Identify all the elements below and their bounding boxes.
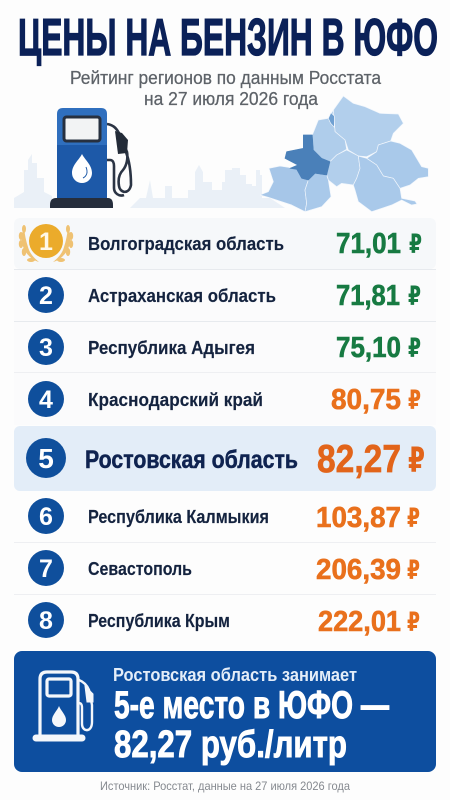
row 3: Adygea [28,329,421,365]
map of the Southern Federal District [260,96,428,212]
row 2: Astrakhan: 71,81 [336,280,400,312]
row 8: Crimea: 222,01 [318,606,401,638]
row 8: Crimea: Республика Крым [88,611,230,631]
callout: summary banner [14,651,436,772]
row 4: Krasnodar: 80,75 [331,384,401,416]
region: northwest [312,110,347,162]
row 6: Kalmykia [28,498,420,534]
panel: ranking list [14,218,436,642]
row 6: Kalmykia: 103,87 [316,502,401,534]
row 4: Krasnodar [28,381,421,417]
row 2: Astrakhan: ₽ [408,281,421,312]
icon: gold laurel [19,225,73,262]
icon: white fuel pump [36,672,93,738]
row 3: Adygea: ₽ [408,333,421,364]
callout: summary banner: Ростовская область занимает [113,665,357,685]
region: southeast [353,156,417,212]
subtitle: Рейтинг регионов по данным Росстата [70,68,382,88]
row 7: Sevastopol: 206,39 [316,554,401,586]
row 2: Astrakhan [28,277,421,313]
row 8: Crimea: ₽ [407,607,420,638]
row 8: Crimea: 8 [39,607,53,635]
source note: Источник: Росстат, данные на 27 июля 2026 года [100,779,350,793]
row 2: Astrakhan: 2 [39,282,53,310]
region: north [333,96,403,157]
row 5: Rostov highlighted: Ростовская область [85,446,298,474]
row 5: Rostov highlighted [14,426,436,491]
row 4: Krasnodar: ₽ [408,385,421,416]
row 4: Krasnodar: Краснодарский край [88,390,263,410]
subtitle: на 27 июля 2026 года [144,89,319,109]
row 1: Volgograd: 1 [39,228,53,256]
row 4: Krasnodar: 4 [39,386,53,414]
region: Rostov highlighted [285,135,330,180]
row 7: Sevastopol [28,550,420,586]
row 1: Volgograd: ₽ [409,229,422,260]
row 5: Rostov highlighted: 82,27 [317,438,401,481]
row 8: Crimea [28,602,420,638]
row 3: Adygea: Республика Адыгея [88,338,255,358]
region: southwest [260,166,308,212]
row 1: Volgograd [19,224,422,262]
row 7: Sevastopol: ₽ [407,555,420,586]
region: south [305,173,331,212]
region: east [367,141,428,188]
region: small northern area [328,113,334,127]
row 2: Astrakhan: Астраханская область [88,286,276,306]
skyline background [14,154,285,208]
icon: fuel pump [50,108,131,208]
row 5: Rostov highlighted: ₽ [408,441,425,481]
subtitle [70,68,382,109]
row 3: Adygea: 3 [39,334,53,362]
callout: summary banner: 82,27 руб./литр [114,724,347,766]
row 6: Kalmykia: ₽ [407,503,420,534]
row 3: Adygea: 75,10 [336,332,401,364]
row 5: Rostov highlighted: 5 [38,443,54,474]
row 1: Volgograd: 71,01 [336,228,401,260]
region: centre [327,150,360,187]
row 6: Kalmykia: Республика Калмыкия [88,507,269,527]
row 1: Volgograd: Волгоградская область [88,234,284,254]
row 7: Sevastopol: 7 [39,555,53,583]
row 6: Kalmykia: 6 [39,503,53,531]
row 7: Sevastopol: Севастополь [88,559,192,579]
